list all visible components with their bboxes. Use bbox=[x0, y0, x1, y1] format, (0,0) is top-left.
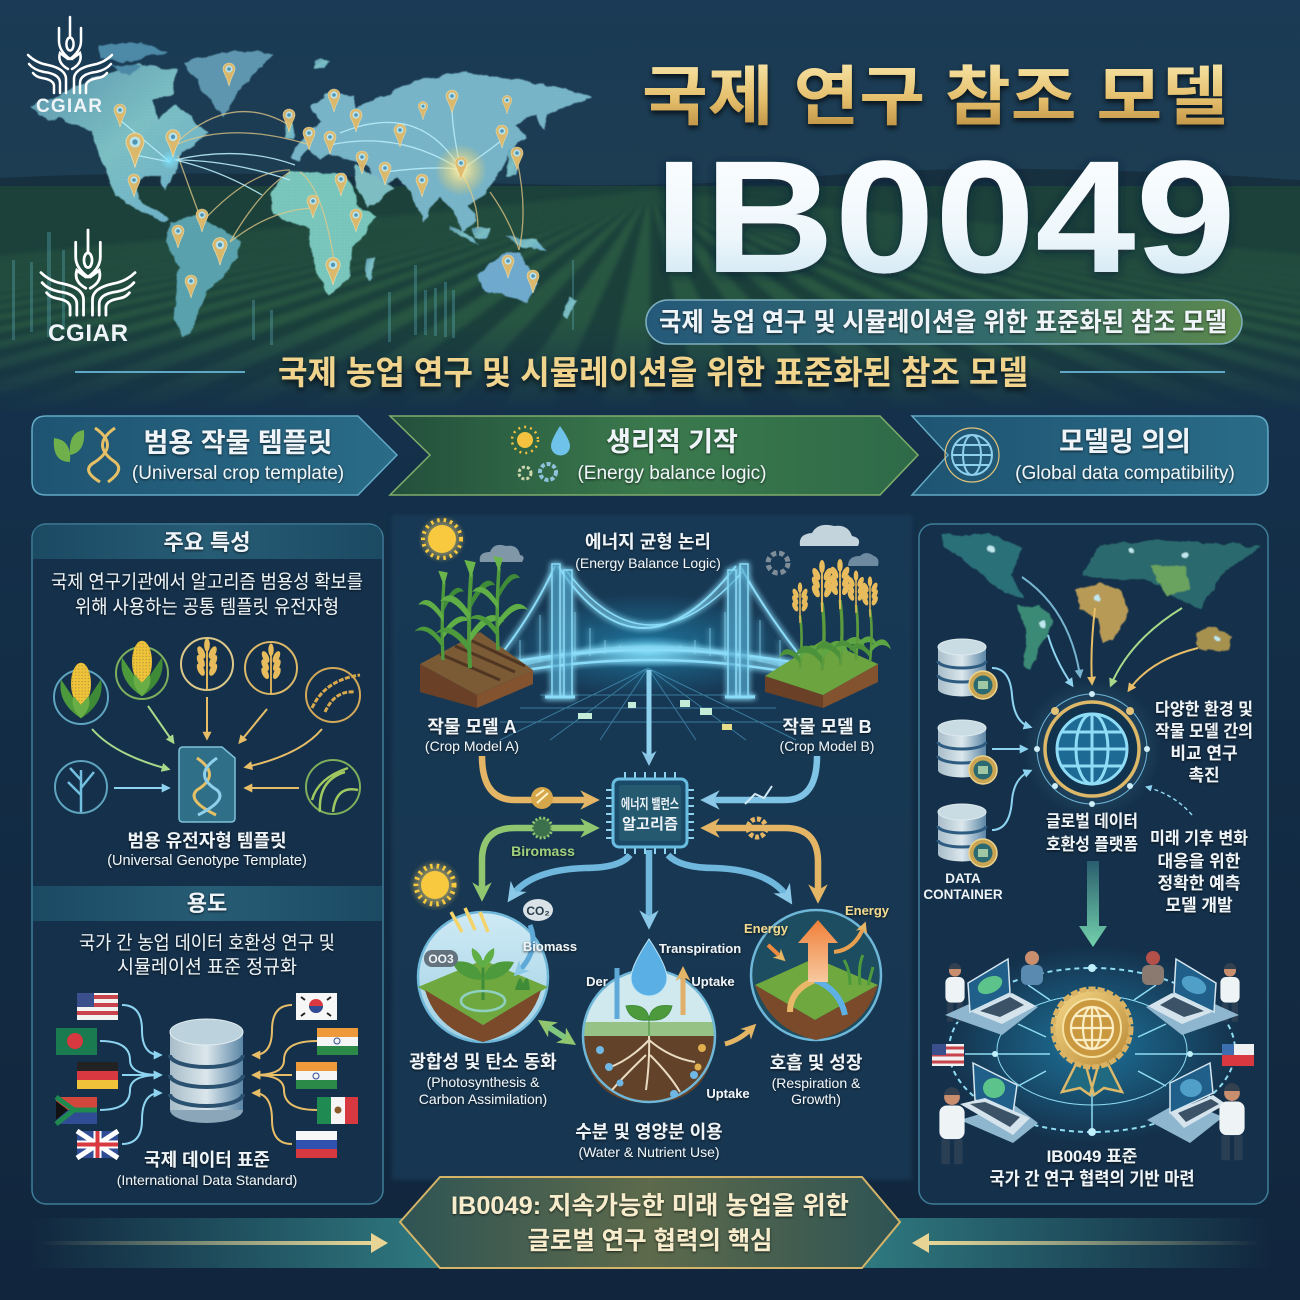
panel: left features and uses bbox=[32, 524, 383, 1204]
location pins bbox=[114, 63, 539, 298]
text: feature description bbox=[51, 571, 363, 618]
laptop: top right bbox=[1146, 959, 1239, 1035]
flag: Bangladesh bbox=[56, 1028, 97, 1055]
icon: water drop bbox=[631, 939, 667, 996]
flag: USA bbox=[77, 993, 118, 1020]
label: crop model A bbox=[425, 717, 519, 754]
dashed arrow bbox=[1147, 787, 1192, 815]
section heading: uses bbox=[33, 886, 382, 921]
illustration: photosynthesis circle: OO3 bbox=[428, 952, 454, 966]
header: modeling significance: 모델링 의의 bbox=[1059, 427, 1191, 457]
text: climate prediction: 모델 개발 bbox=[1165, 896, 1233, 915]
labels: energy: Energy bbox=[744, 921, 789, 936]
text: feature description: 위해 사용하는 공통 템플릿 유전자형 bbox=[75, 596, 339, 618]
arrows into globe bbox=[1022, 577, 1198, 690]
header: universal crop template: 범용 작물 템플릿 bbox=[144, 428, 332, 458]
bottom band right bbox=[860, 1218, 1270, 1268]
model code IB0049: IB0049 bbox=[654, 127, 1236, 306]
text: climate prediction: 대응을 위한 bbox=[1158, 852, 1241, 871]
label: CO2 bubble bbox=[523, 899, 553, 921]
label: global data platform: 글로벌 데이터 bbox=[1046, 812, 1138, 831]
label: respiration and growth: (Respiration & bbox=[772, 1075, 861, 1091]
title: 국제 연구 참조 모델 bbox=[642, 60, 1228, 133]
label: water and nutrient use: (Water & Nutrient Use) bbox=[578, 1144, 720, 1160]
text: use description bbox=[79, 932, 335, 978]
big arrow down bbox=[1079, 861, 1107, 947]
flag: South Africa bbox=[56, 1097, 97, 1124]
flag: Chile small bbox=[1222, 1044, 1254, 1066]
illustration: crop model B field bbox=[765, 559, 891, 708]
label: crop model B: 작물 모델 B bbox=[782, 717, 872, 737]
bottom banner: 글로벌 연구 협력의 핵심 bbox=[528, 1227, 772, 1255]
label: photosynthesis: Carbon Assimilation) bbox=[419, 1091, 547, 1107]
panel: right modeling significance bbox=[919, 524, 1268, 1204]
laptop: top left bbox=[945, 959, 1038, 1035]
icon: sun, drop, gears bbox=[512, 426, 570, 480]
labels: water flow: Der bbox=[586, 974, 608, 989]
tagline: 국제 농업 연구 및 시뮬레이션을 위한 표준화된 참조 모델 bbox=[278, 354, 1028, 391]
section heading: key features bbox=[33, 525, 382, 559]
icon: data platform globe bbox=[1022, 679, 1162, 819]
label: IB0049 standard bbox=[990, 1147, 1194, 1189]
text: climate prediction: 정확한 예측 bbox=[1158, 874, 1240, 893]
labels: water flow: Uptake bbox=[706, 1086, 750, 1101]
flag: Mexico bbox=[317, 1097, 358, 1124]
text: comparative research: 비교 연구 bbox=[1170, 744, 1238, 763]
icon: sun and clouds bbox=[418, 515, 878, 573]
logo: CGIAR top bbox=[28, 17, 112, 117]
bottom band left bbox=[30, 1218, 440, 1268]
icon: leaf and DNA bbox=[54, 428, 119, 482]
label: photosynthesis bbox=[409, 1052, 557, 1107]
label: biomass: Biromass bbox=[511, 843, 575, 859]
bottom banner: IB0049: 지속가능한 미래 농업을 위한 bbox=[451, 1192, 849, 1220]
label: international data standard: 국제 데이터 표준 bbox=[144, 1150, 270, 1170]
label: international data standard bbox=[117, 1150, 297, 1188]
flow icons bbox=[531, 786, 772, 838]
icons: crop circles bbox=[54, 638, 360, 814]
label: CO2 bubble: CO₂ bbox=[526, 904, 550, 918]
logo: CGIAR top: CGIAR bbox=[36, 96, 102, 117]
label: global data platform: 호환성 플랫폼 bbox=[1046, 835, 1138, 854]
icon: sun over photosynthesis bbox=[409, 859, 461, 911]
bottom banner bbox=[400, 1177, 900, 1268]
arrows into template bbox=[92, 697, 322, 788]
label: global data platform bbox=[1046, 812, 1138, 854]
label: energy balance logic: 에너지 균형 논리 bbox=[585, 532, 711, 552]
icon: processor chip: 에너지 밸런스 bbox=[621, 796, 679, 812]
arrows from containers bbox=[992, 668, 1030, 830]
section heading: key features: 주요 특성 bbox=[163, 530, 251, 555]
illustration: crop model A field bbox=[414, 556, 533, 708]
arrow: bottom left bbox=[40, 1233, 388, 1253]
flag: Germany bbox=[77, 1062, 118, 1089]
center panel background bbox=[392, 515, 912, 1180]
arrow: gold to respiration bbox=[725, 1028, 752, 1044]
label: photosynthesis: (Photosynthesis & bbox=[427, 1074, 540, 1090]
label: universal genotype template: 범용 유전자형 템플릿 bbox=[127, 831, 287, 851]
label: respiration and growth bbox=[770, 1053, 863, 1107]
laptops bbox=[945, 959, 1239, 1143]
illustration: bridge bbox=[480, 564, 823, 740]
arrow: bridge to chip bbox=[646, 670, 652, 760]
labels: water flow bbox=[586, 941, 750, 1101]
icon: processor chip bbox=[606, 772, 694, 854]
text: comparative research: 작물 모델 간의 bbox=[1155, 722, 1253, 741]
flow arrows around chip bbox=[482, 756, 818, 922]
text: climate prediction bbox=[1150, 829, 1248, 915]
header: physiological mechanism bbox=[390, 416, 918, 495]
text: climate prediction: 미래 기후 변화 bbox=[1150, 829, 1248, 848]
label: crop model B: (Crop Model B) bbox=[780, 738, 874, 754]
mini world map bbox=[940, 533, 1262, 670]
text: comparative research: 촉진 bbox=[1188, 766, 1220, 785]
connection arcs bbox=[120, 106, 523, 275]
illustration: respiration circle bbox=[751, 910, 881, 1040]
arrows: energy small bbox=[768, 926, 864, 958]
text: comparative research: 다양한 환경 및 bbox=[1155, 700, 1253, 719]
collaboration network bbox=[932, 945, 1254, 1164]
flag: Russia bbox=[296, 1131, 337, 1158]
standing scientists bbox=[939, 1083, 1245, 1164]
header: physiological mechanism: 생리적 기작 bbox=[606, 427, 738, 457]
icon: network globe bbox=[945, 428, 999, 482]
label: universal genotype template bbox=[107, 831, 307, 869]
labels: water flow: Uptake bbox=[691, 974, 735, 989]
text: feature description: 국제 연구기관에서 알고리즘 범용성 확보를 bbox=[51, 571, 363, 593]
label: respiration and growth: 호흡 및 성장 bbox=[770, 1053, 863, 1073]
label: IB0049 standard: IB0049 표준 bbox=[1047, 1147, 1137, 1166]
labels: water flow: Transpiration bbox=[659, 941, 741, 956]
label: energy balance logic bbox=[575, 532, 721, 571]
header: physiological mechanism: (Energy balance logic) bbox=[577, 463, 767, 484]
subtitle pill: 국제 농업 연구 및 시뮬레이션을 위한 표준화된 참조 모델 bbox=[659, 307, 1227, 337]
flag: USA small bbox=[932, 1044, 964, 1066]
subtitle pill bbox=[646, 300, 1242, 344]
section heading: uses: 용도 bbox=[187, 891, 227, 916]
arrow: bottom right bbox=[912, 1233, 1260, 1253]
label: respiration and growth: Growth) bbox=[791, 1091, 841, 1107]
laptop: bottom left bbox=[960, 1063, 1038, 1143]
labels: energy: Energy bbox=[845, 903, 890, 918]
label: IB0049 standard: 국가 간 연구 협력의 기반 마련 bbox=[990, 1169, 1194, 1189]
text: use description: 국가 간 농업 데이터 호환성 연구 및 bbox=[79, 932, 335, 954]
arrows: transpiration and uptake bbox=[617, 968, 683, 1019]
continents bbox=[33, 42, 593, 337]
label: universal genotype template: (Universal Genotype Template) bbox=[107, 853, 307, 869]
label: international data standard: (International Data Standard) bbox=[117, 1172, 297, 1188]
label: energy balance logic: (Energy Balance Logic) bbox=[575, 555, 721, 571]
flag: Korea bbox=[296, 993, 337, 1020]
label: water and nutrient use: 수분 및 영양분 이용 bbox=[575, 1122, 723, 1142]
illustration: water and nutrient circle bbox=[583, 970, 715, 1103]
farm field backdrop bbox=[0, 169, 1300, 416]
logo: CGIAR lower: CGIAR bbox=[48, 320, 128, 347]
label: crop model B bbox=[780, 717, 874, 754]
flag: India second bbox=[296, 1062, 337, 1089]
header: modeling significance bbox=[912, 416, 1268, 495]
text: comparative research bbox=[1155, 700, 1253, 785]
data containers: CONTAINER bbox=[923, 887, 1003, 902]
header: universal crop template bbox=[32, 416, 397, 495]
panel: center energy balance flow bbox=[409, 515, 891, 1160]
labels: energy bbox=[744, 903, 890, 936]
arrow: green double arrow bbox=[544, 1024, 570, 1041]
text: use description: 시뮬레이션 표준 정규화 bbox=[117, 956, 297, 978]
flag: UK bbox=[77, 1131, 118, 1158]
medal bbox=[1053, 989, 1131, 1095]
logo: CGIAR lower bbox=[41, 230, 135, 347]
label: biomass flow: Biomass bbox=[523, 939, 577, 954]
icon: processor chip: 알고리즘 bbox=[622, 816, 678, 833]
icon: database bbox=[170, 1019, 243, 1123]
icon: DNA document bbox=[179, 747, 235, 822]
illustration: photosynthesis circle bbox=[418, 908, 548, 1042]
data containers bbox=[923, 639, 1003, 902]
data containers: DATA bbox=[945, 871, 981, 886]
label: photosynthesis: 광합성 및 탄소 동화 bbox=[409, 1052, 557, 1072]
header: universal crop template: (Universal crop template) bbox=[132, 463, 344, 484]
header: modeling significance: (Global data compatibility) bbox=[1015, 463, 1235, 484]
seated scientists bbox=[945, 951, 1240, 1022]
flag: India bbox=[317, 1028, 358, 1055]
arrows into database bbox=[100, 1005, 317, 1144]
label: water and nutrient use bbox=[575, 1122, 723, 1160]
world map with research pins bbox=[30, 40, 595, 340]
label: crop model A: (Crop Model A) bbox=[425, 738, 519, 754]
label: crop model A: 작물 모델 A bbox=[427, 717, 517, 737]
laptop: bottom right bbox=[1147, 1063, 1226, 1143]
flags bbox=[56, 993, 358, 1158]
